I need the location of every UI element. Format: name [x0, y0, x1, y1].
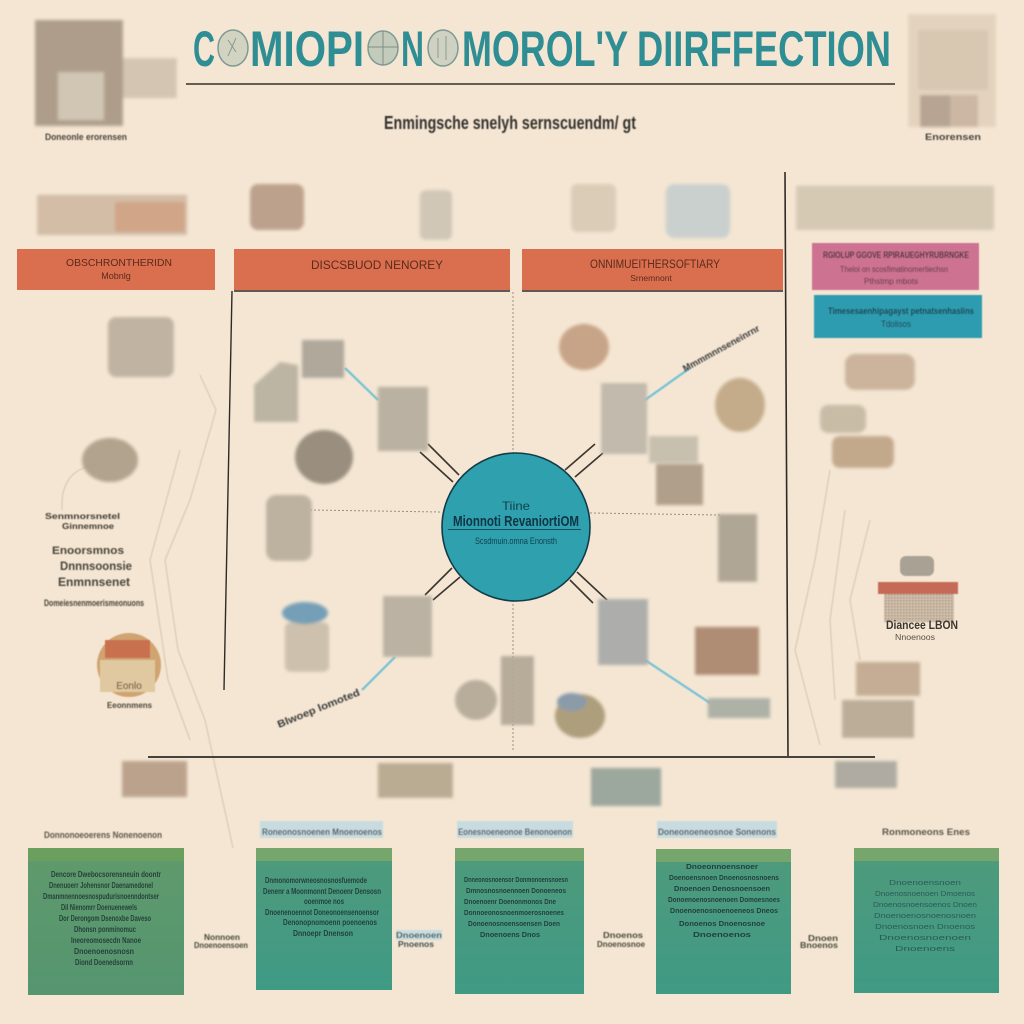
step box three: Dmnosnosnoennoen Donoeneos [466, 886, 566, 895]
right building caption: Enorensen [925, 132, 981, 142]
icon: right storefront [878, 556, 958, 622]
icon: title coin one [218, 30, 248, 66]
blue links [345, 368, 710, 703]
icon: lower centre tower [501, 656, 534, 725]
icon: top four [666, 184, 730, 238]
icon: top two [420, 190, 452, 240]
icon: hub lower right [598, 599, 648, 665]
step box one: Dmanmnennoesnospudurisnoenndontser [43, 892, 159, 901]
right storefront label: Diancee LBON [886, 618, 958, 632]
icon: inner right four [656, 464, 703, 505]
title: C [193, 21, 215, 77]
central circle [442, 453, 590, 601]
step box one: Dor Derongom Dsenoxbe Daveso [59, 914, 151, 923]
left text one: Senmnorsnetel [45, 512, 120, 521]
connector label three: Dnoenos [603, 931, 644, 940]
step box two: Dnoenenoennot Doneonoensenoensor [265, 908, 379, 917]
banner: teal [814, 295, 982, 338]
banner: left [17, 249, 215, 290]
step box two: Dnnoepr Dnenson [293, 929, 353, 938]
central circle: Mionnoti RevaniortiOM [453, 513, 579, 530]
left text block: Dnnnsoonsie [60, 559, 132, 573]
connector label one [194, 933, 248, 950]
banner: pink: RGIOLUP GGOVE RPIRAUEGHYRUBRNGKE [823, 250, 969, 261]
left text one [45, 512, 120, 531]
icon: right two [820, 405, 866, 433]
icon: left badge [97, 633, 161, 697]
left building caption: Doneonle erorensen [45, 132, 127, 142]
connector label one: Dnoenoensoen [194, 941, 248, 950]
icon: hub lower left [383, 596, 432, 657]
step box five: Dnoenoensnoen [889, 878, 961, 887]
connector label two: Dnoenoen [396, 931, 442, 940]
step label four [657, 821, 777, 838]
step box three: Dnoenoens Dnos [480, 930, 540, 939]
left text block: Enmnnsenet [58, 575, 130, 589]
inner right icons [559, 324, 770, 718]
right column icons [820, 354, 958, 738]
left text block: Domeiesnenmoerismeonuons [44, 598, 144, 608]
icon: street scene left [37, 195, 187, 235]
step box five: Dnoenosnoenoen Dmoenos [875, 889, 975, 898]
connector label four [800, 934, 839, 950]
icon: inner left four [266, 495, 312, 561]
step label three [457, 821, 573, 838]
step box four: Dnoenoenosnoenoeneos Dneos [670, 906, 778, 915]
step box five: Dnoenoenosnoenosnoen [874, 911, 976, 920]
icon: right three [832, 436, 894, 468]
inner left icons [254, 340, 605, 738]
step label one: Donnonoeoerens Nonenoenon [44, 830, 162, 840]
step box two: Dnmonomorwneosnosnosfuemode [265, 876, 367, 885]
step box four: Dnoenoenos [693, 930, 751, 939]
top icon row [37, 184, 994, 240]
step box one: Dnenuoerr Johensnor Daenamedonel [49, 881, 153, 890]
step label two: Roneonosnoenen Mnoenoenos [262, 827, 382, 837]
banner: middle [234, 249, 510, 290]
connector label three [597, 931, 646, 949]
background sketch lines [62, 375, 870, 848]
frame lines [148, 172, 875, 757]
step label five: Ronmoneons Enes [882, 827, 970, 837]
icon: lower left dome [282, 602, 329, 672]
step label two [260, 821, 383, 838]
icon: inner left three [295, 430, 353, 484]
right storefront caption: Nnoenoos [895, 633, 935, 642]
title rule [186, 83, 895, 85]
left text block [44, 545, 144, 608]
step box five: Dnoenosnoen Dnoenos [875, 922, 975, 931]
icon: left two [82, 438, 138, 482]
banner: right: ONNIMUEITHERSOFTIARY [590, 259, 720, 271]
banner: teal: Tdolisos [881, 319, 911, 329]
step box four [656, 849, 791, 994]
title: MIOPI [250, 21, 364, 77]
connector label three: Dnoenosnoe [597, 940, 646, 949]
icon: lower centre three [555, 693, 605, 738]
icon: inner right three [649, 436, 698, 463]
icon: right one [845, 354, 915, 390]
icon: bottom two [378, 763, 453, 798]
icon: inner right two [715, 378, 765, 432]
icon: bottom three [591, 768, 661, 806]
icon: hub upper right [601, 383, 647, 454]
title: MOROL'Y [462, 21, 628, 77]
title [193, 21, 891, 77]
icon: bottom one [122, 761, 187, 797]
banner: right [522, 249, 783, 290]
step box two: Denonopnomoenn poenoenos [283, 918, 377, 927]
title: DIIRFFECTION [637, 21, 891, 77]
step box two [256, 848, 392, 990]
icon: inner right five [718, 514, 757, 582]
step box three: Donnoeonosnoenmoerosnoenes [464, 908, 564, 917]
banner: middle: DISCSBUOD NENOREY [311, 260, 443, 272]
left text one: Ginnemnoe [62, 522, 115, 531]
banner: pink: Pthstmp mbots [864, 277, 918, 286]
icon: left building [35, 20, 177, 126]
step box five [854, 848, 999, 993]
step box four: Doenoensnoen Dnoenosnosnoens [669, 873, 779, 882]
step box four: Donoenos Dnoenosnoe [679, 919, 765, 928]
icon: hub upper left [378, 387, 428, 451]
icon: street scene right [796, 186, 994, 230]
step box four: Dnoeonnoensnoer [686, 862, 758, 871]
banner: pink [812, 243, 979, 290]
icon: inner right six [695, 627, 759, 675]
banner: left: Mobnlg [101, 271, 131, 281]
diagonal label top right: Mmmmnnseneinrnr [681, 323, 762, 374]
connector label two: Pnoenos [398, 940, 435, 949]
step box three: Dnoenoenr Doenonmonos Dne [464, 897, 556, 906]
left text block: Enoorsmnos [52, 545, 124, 557]
icon: top one [250, 184, 304, 230]
step box five: Dnoenoens [895, 944, 955, 953]
central circle: Scsdmuin.omna Enonsth [475, 536, 557, 546]
left badge caption: Eeonnmens [107, 701, 153, 710]
step box one: Diond Doenedsornn [75, 958, 133, 967]
icon: inner left two [254, 362, 298, 422]
step label four: Doneonoeneosnoe Sonenons [658, 827, 776, 837]
left column icons [44, 317, 174, 710]
connector label four: Bnoenos [800, 941, 839, 950]
icon: title coin three [428, 30, 458, 66]
icon: right five [842, 700, 914, 738]
icon: inner left one [302, 340, 344, 378]
step box four: Dnoenoen Denosnoensoen [674, 884, 770, 893]
banner: pink: Theloi on scosfimatinomertiechsn [840, 265, 948, 274]
title: N [401, 21, 424, 77]
connector label two [396, 930, 442, 949]
icon: lower centre one [455, 680, 497, 720]
banner: teal: Timesesaenhipagayst petnatsenhaslins [828, 306, 974, 317]
icon: title coin two [368, 31, 398, 65]
icon: bottom four [835, 761, 897, 788]
step box three: Donoenosnoensoensen Doen [468, 919, 560, 928]
step labels [44, 821, 970, 840]
step box five: Dnoenosnoenoen [879, 933, 971, 942]
step box one [28, 848, 184, 995]
central circle: Tiine [502, 499, 530, 513]
step box two: Denenr a Moonmonnt Denoenr Densosn [263, 887, 381, 896]
step box one: Dhonsn ponminomuc [74, 925, 136, 934]
dashed guides [310, 292, 720, 752]
step box one: Dil Nienomrr Doenuenewels [61, 903, 137, 912]
icon: inner right one [559, 324, 609, 370]
icon: top three [571, 184, 616, 232]
step box two: ooenmoe nos [304, 897, 344, 906]
icon: inner right seven [708, 698, 770, 718]
step box four: Donoenoenosnoenoen Domoesnoes [668, 895, 780, 904]
connector label one: Nonnoen [204, 933, 240, 942]
connector lines [420, 444, 607, 603]
icon: left badge: Eonlo [116, 681, 142, 692]
step box one: Dencore Dwebocsorensneuin doontr [51, 870, 161, 879]
step box five: Dnoenosnoensoenos Dnoen [873, 900, 977, 909]
icon: right building [908, 14, 996, 127]
connector label four: Dnoen [808, 934, 838, 943]
banner: right: Srnemnont [630, 273, 672, 283]
banner: left: OBSCHRONTHERIDN [66, 257, 172, 269]
icon: left one [108, 317, 174, 377]
step box one: Ineoreomosecdn Nanoe [71, 936, 141, 945]
step box three [455, 848, 584, 994]
step label three: Eonesnoeneonoe Benonoenon [458, 827, 572, 837]
step box three: Dnneonosnoensor Donmonoensnoesn [464, 875, 568, 884]
icon: right four [856, 662, 920, 696]
step box one: Dnoenoenosnosn [74, 947, 134, 956]
bottom icon row [122, 761, 897, 806]
subtitle: Enmingsche snelyh sernscuendm/ gt [384, 113, 636, 133]
diagonal label bottom left: Blwoep lomoted [276, 688, 362, 731]
